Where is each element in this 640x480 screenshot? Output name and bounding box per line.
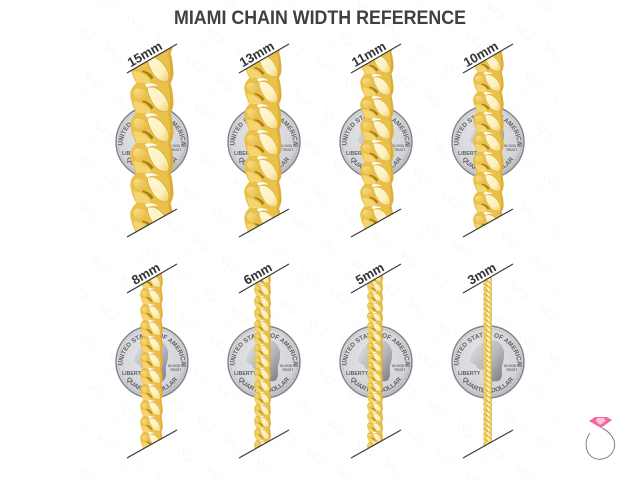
coin bbox=[339, 108, 413, 176]
bottom measure line bbox=[127, 209, 177, 237]
bottom measure line bbox=[239, 209, 289, 237]
coin: TRUST bbox=[506, 368, 518, 372]
coin: TRUST bbox=[282, 368, 294, 372]
coin: IN GOD WE bbox=[392, 144, 411, 148]
coin: QUARTER DOLLAR bbox=[463, 377, 514, 392]
panel: 10mm chain bbox=[451, 38, 525, 238]
coin: LIBERTY bbox=[346, 371, 369, 377]
label: 11mm bbox=[349, 38, 388, 70]
top measure line bbox=[351, 264, 401, 293]
coin: LIBERTY bbox=[122, 371, 145, 377]
coin: LIBERTY bbox=[234, 151, 257, 157]
top measure line bbox=[127, 44, 177, 73]
coin: LIBERTY bbox=[346, 151, 369, 157]
chain bbox=[483, 276, 492, 447]
coin: TRUST bbox=[394, 368, 406, 372]
coin: IN GOD WE bbox=[280, 364, 299, 368]
coin: TRUST bbox=[282, 148, 294, 152]
label: 10mm bbox=[461, 38, 501, 70]
coin: TRUST bbox=[170, 148, 182, 152]
panel: 15mm chain bbox=[115, 38, 189, 238]
coin bbox=[451, 326, 525, 398]
coin: TRUST bbox=[170, 368, 182, 372]
coin: UNITED STATES OF AMERICA bbox=[118, 118, 186, 146]
coin: IN GOD WE bbox=[280, 144, 299, 148]
panel: 8mm chain bbox=[115, 260, 189, 458]
bottom measure line bbox=[463, 209, 513, 237]
top measure line bbox=[463, 264, 513, 293]
coin: UNITED STATES OF AMERICA bbox=[454, 115, 522, 146]
coin: IN GOD WE bbox=[504, 364, 523, 368]
bottom measure line bbox=[127, 430, 177, 458]
coin bbox=[115, 110, 189, 174]
bottom measure line bbox=[351, 209, 401, 237]
coin: LIBERTY bbox=[458, 151, 481, 157]
coin: UNITED STATES OF AMERICA bbox=[230, 118, 298, 146]
chain bbox=[130, 46, 174, 235]
coin: UNITED STATES OF AMERICA bbox=[118, 334, 186, 366]
coin: IN GOD WE bbox=[392, 364, 411, 368]
bottom measure line bbox=[239, 430, 289, 458]
coin: QUARTER DOLLAR bbox=[127, 157, 178, 166]
chain bbox=[473, 49, 504, 231]
label: 15mm bbox=[125, 38, 165, 70]
panel: 11mm chain bbox=[339, 38, 413, 238]
panel: 6mm chain bbox=[227, 260, 301, 458]
coin: QUARTER DOLLAR bbox=[127, 377, 178, 391]
panel: 3mm chain bbox=[451, 260, 525, 458]
coin: LIBERTY bbox=[458, 371, 481, 377]
coin: QUARTER DOLLAR bbox=[351, 377, 402, 392]
coin: TRUST bbox=[506, 148, 518, 152]
coin: QUARTER DOLLAR bbox=[463, 157, 514, 171]
label: 13mm bbox=[237, 38, 277, 70]
coin: UNITED STATES OF AMERICA bbox=[454, 332, 522, 366]
chain bbox=[254, 274, 271, 450]
top measure line bbox=[127, 264, 177, 293]
bottom measure line bbox=[463, 430, 513, 458]
panel: 5mm chain bbox=[339, 260, 413, 458]
coin: QUARTER DOLLAR bbox=[351, 157, 402, 169]
title: MIAMI CHAIN WIDTH REFERENCE bbox=[174, 7, 466, 29]
label: 8mm bbox=[129, 260, 163, 288]
coin bbox=[115, 326, 189, 398]
panel: 13mm chain bbox=[227, 38, 301, 238]
label: 5mm bbox=[353, 260, 387, 288]
top measure line bbox=[351, 44, 401, 73]
coin: IN GOD WE bbox=[168, 144, 187, 148]
chain bbox=[367, 274, 383, 449]
coin: UNITED STATES OF AMERICA bbox=[342, 115, 410, 146]
coin: QUARTER DOLLAR bbox=[239, 157, 290, 168]
coin: IN GOD WE bbox=[504, 144, 523, 148]
label: 6mm bbox=[241, 260, 275, 288]
coin bbox=[227, 326, 301, 398]
coin bbox=[451, 108, 525, 176]
coin: UNITED STATES OF AMERICA bbox=[342, 333, 410, 366]
coin: QUARTER DOLLAR bbox=[239, 377, 290, 392]
icon: diamond ring logo bbox=[586, 417, 615, 459]
label: 3mm bbox=[465, 260, 499, 288]
coin bbox=[227, 108, 301, 174]
coin: LIBERTY bbox=[234, 371, 257, 377]
coin: IN GOD WE bbox=[168, 364, 187, 368]
chain bbox=[244, 48, 282, 234]
top measure line bbox=[239, 44, 289, 73]
bottom measure line bbox=[351, 430, 401, 458]
coin: TRUST bbox=[394, 148, 406, 152]
top measure line bbox=[463, 44, 513, 73]
coin bbox=[339, 326, 413, 398]
coin: LIBERTY bbox=[122, 151, 145, 157]
coin: UNITED STATES OF AMERICA bbox=[230, 333, 298, 366]
chain bbox=[140, 272, 163, 451]
top measure line bbox=[239, 264, 289, 293]
chain bbox=[360, 48, 394, 232]
